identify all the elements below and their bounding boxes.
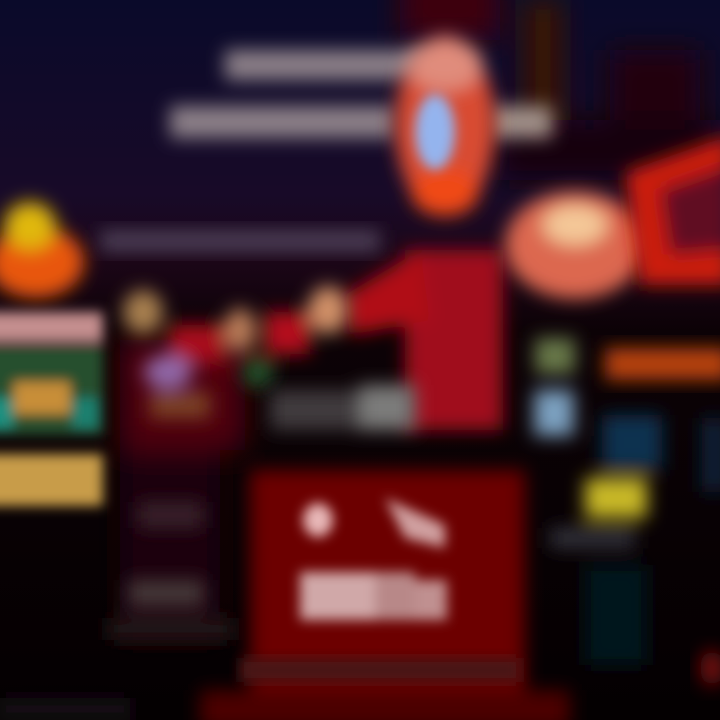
right sign xyxy=(505,135,720,380)
red awning xyxy=(625,135,720,285)
lower left stats xyxy=(0,502,233,720)
right column icons xyxy=(534,338,720,665)
figure head xyxy=(395,35,495,216)
left maroon column xyxy=(120,340,245,640)
footnote xyxy=(240,658,520,682)
percentage figures xyxy=(300,498,447,620)
central figure xyxy=(345,35,503,430)
figure body xyxy=(345,250,503,430)
left slot machine xyxy=(0,202,103,506)
orange bar xyxy=(605,348,720,380)
red bunting row xyxy=(123,286,348,418)
slot machine body xyxy=(0,312,103,506)
grey machine panel xyxy=(270,385,415,430)
lower right accent xyxy=(700,650,720,686)
sunburst badge xyxy=(505,191,645,299)
title block xyxy=(170,50,552,138)
upper right dark red backdrop xyxy=(400,0,720,180)
subtitle block xyxy=(100,230,380,252)
figure eye xyxy=(415,94,455,170)
central red panel xyxy=(200,470,570,720)
red panel background xyxy=(200,470,570,720)
slot machine lamp xyxy=(0,202,84,298)
